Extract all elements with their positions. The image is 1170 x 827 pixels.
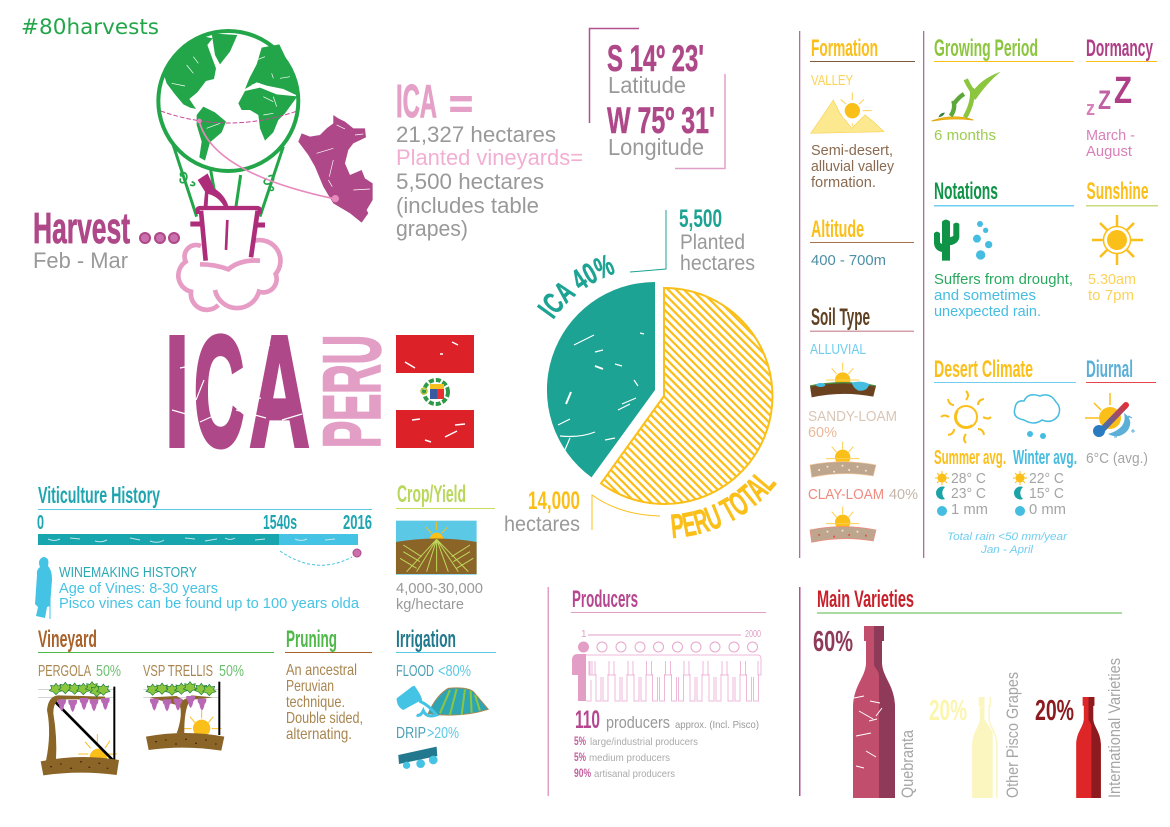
icon: alluvial soil [810, 363, 876, 397]
variety percentages: 20% [1035, 695, 1074, 727]
Ica area text [396, 75, 583, 241]
equator dashed line [161, 111, 297, 123]
panel: growing period: Growing Period [934, 35, 1038, 62]
Ica area text: 5,500 hectares [396, 169, 544, 194]
flag emblem [421, 380, 448, 404]
icon: pergola vine [38, 682, 119, 775]
panel: dormancy [1086, 35, 1157, 160]
panel: formation [810, 35, 915, 191]
panel: desert climate [934, 356, 1077, 556]
producers count: 110 [575, 706, 600, 734]
Ica area text: (includes table [396, 193, 539, 218]
title: ICA: C [194, 304, 244, 480]
bottle: other Pisco grapes [972, 697, 997, 798]
summer averages: 28° C [951, 470, 986, 487]
panel: diurnal [1085, 356, 1156, 467]
panel: diurnal: 6°C (avg.) [1086, 450, 1148, 467]
icon: winter cloud [1014, 395, 1060, 439]
pie: Ica 40% [547, 282, 655, 477]
panel: crop yield: kg/hectare [396, 596, 464, 613]
panel: dormancy: August [1086, 143, 1133, 160]
producer breakdown: 90% [574, 766, 591, 780]
producer breakdown [574, 734, 698, 780]
panel: producers [548, 586, 766, 796]
variety percentages: 20% [929, 695, 967, 727]
panel: soil type: Soil Type [811, 304, 870, 331]
panel: crop yield: 4,000-30,000 [396, 580, 483, 597]
pictogram scale: 1 [581, 629, 587, 640]
total rain note: Total rain <50 mm/year [947, 531, 1068, 543]
coordinates box: Latitude [608, 72, 686, 98]
panel: altitude: 400 - 700m [811, 252, 886, 269]
icon: valley with sun [811, 93, 884, 133]
title: PERU: PERU [308, 335, 398, 448]
pie chart [536, 254, 777, 538]
harvest heading: Feb - Mar [33, 248, 128, 273]
panel: formation: VALLEY [811, 72, 853, 89]
Ica area text: ICA [396, 75, 437, 127]
summer averages [934, 447, 1006, 518]
panel: pruning: technique. [286, 694, 345, 711]
column dividers [799, 31, 924, 558]
panel: crop yield: Crop/Yield [397, 481, 466, 508]
icon: thermometer with sun and moon [1085, 393, 1135, 437]
panel: irrigation: >20% [427, 725, 459, 742]
callout: planted hectares: Planted [680, 231, 745, 254]
producers count: approx. (Incl. Pisco) [675, 719, 759, 731]
winemaking text [59, 564, 360, 612]
panel: irrigation: Irrigation [396, 626, 456, 653]
timeline labels: 1540s [263, 512, 297, 534]
icon: Peruvian flag [396, 335, 474, 448]
map of Peru [298, 115, 373, 223]
producers count: producers [606, 713, 670, 732]
globe [158, 31, 298, 171]
callout: total hectares [504, 487, 660, 536]
pie: Peru total [601, 288, 772, 504]
cloud and bucket [178, 173, 280, 310]
panel: pruning: An ancestral [286, 662, 357, 679]
panel: pruning: Double sided, [286, 710, 363, 727]
callout: total hectares: hectares [504, 513, 580, 536]
panel: sunshine: 5.30am [1088, 271, 1136, 288]
Ica area text: 21,327 hectares [396, 122, 556, 147]
variety names [898, 658, 1124, 798]
winemaking text: Pisco vines can be found up to 100 years olda [59, 595, 360, 612]
Ica area text: Planted vineyards= [396, 145, 583, 170]
icon: sun [1092, 215, 1143, 265]
callout: planted hectares: hectares [680, 252, 755, 275]
panel: main varieties [799, 586, 1124, 798]
panel: soil type: ALLUVIAL [810, 341, 866, 358]
panel: vineyard: VSP TRELLIS [143, 663, 213, 680]
winter averages: 0 mm [1029, 501, 1066, 518]
pie labels [536, 254, 777, 538]
panel: soil type: SANDY-LOAM [808, 408, 897, 425]
panel: notations: Suffers from drought, [934, 271, 1073, 288]
harvest heading [33, 204, 179, 273]
icon: drip irrigation [398, 747, 438, 769]
icon: sleeping zzz [1086, 70, 1132, 120]
callout: planted hectares [630, 205, 755, 275]
total rain note: Jan - April [980, 544, 1034, 556]
icon: sleeping zzz: Z [1114, 70, 1132, 112]
panel: diurnal: Diurnal [1086, 356, 1133, 383]
panel: formation: formation. [811, 174, 876, 191]
producer breakdown: medium producers [589, 752, 670, 764]
panel: vineyard: 50% [219, 663, 244, 680]
timeline labels [37, 512, 372, 534]
icon: sleeping zzz: Z [1098, 85, 1111, 115]
panel: formation: Semi-desert, [811, 142, 893, 159]
icon: growing shoots [932, 72, 1001, 121]
icon: vineyard field [396, 521, 477, 575]
title: ICA: A [250, 304, 310, 480]
Peru distress marks [317, 125, 370, 190]
panel: formation: Formation [811, 35, 878, 62]
panel: notations [934, 178, 1074, 320]
pictogram scale [581, 629, 761, 640]
icon: clay-loam soil [810, 507, 876, 542]
timeline labels: 0 [37, 512, 44, 534]
winter averages: Winter avg. [1013, 447, 1077, 469]
pie labels: ICA 40% [536, 254, 614, 320]
icon: rain drops [973, 221, 992, 260]
producer breakdown: 5% [574, 734, 586, 748]
winter averages: 22° C [1029, 470, 1064, 487]
pie: Ica distress marks [558, 333, 644, 452]
pictogram: people [572, 642, 761, 701]
panel: viticulture history: Viticulture History [38, 482, 160, 508]
globe distress marks [172, 57, 290, 128]
panel: growing period [932, 35, 1074, 144]
icon: elderly woman [35, 557, 52, 618]
producer breakdown: artisanal producers [594, 768, 675, 780]
callout: planted hectares: 5,500 [679, 205, 722, 233]
icon: sandy-loam soil [810, 442, 876, 477]
variety names: Quebranta [898, 730, 917, 798]
panel: soil type: 60% [808, 424, 837, 441]
panel: notations: unexpected rain. [934, 303, 1041, 320]
winter averages: 15° C [1029, 485, 1064, 502]
balloon ropes [173, 143, 283, 217]
icon: flood irrigation [397, 686, 488, 716]
bottle in bucket [198, 173, 228, 206]
coordinates box: Longitude [608, 134, 704, 160]
panel: notations: and sometimes [934, 287, 1036, 304]
timeline arc and marker [280, 551, 352, 565]
total rain note [947, 531, 1068, 556]
variety names: International Varieties [1105, 658, 1124, 798]
icon: summer sun [941, 391, 991, 443]
producer breakdown: large/industrial producers [590, 736, 698, 748]
panel: irrigation: FLOOD [396, 663, 434, 680]
winter averages [1013, 447, 1077, 518]
panel: vineyard: 50% [96, 663, 121, 680]
summer averages: Summer avg. [934, 447, 1006, 469]
panel: main varieties: Main Varieties [817, 586, 914, 613]
producer breakdown: 5% [574, 750, 586, 764]
timeline bar [38, 534, 358, 545]
panel: vineyard: Vineyard [38, 626, 97, 653]
panel: notations: Notations [934, 178, 998, 205]
location connector [199, 122, 335, 199]
bottle: international varieties [1076, 697, 1101, 798]
panel: sunshine [1086, 178, 1158, 304]
panel: growing period: 6 months [934, 127, 996, 144]
coordinates box [590, 28, 725, 168]
winemaking text: WINEMAKING HISTORY [59, 564, 197, 581]
panel: altitude [810, 216, 914, 269]
producers count [575, 706, 759, 734]
panel: vineyard: PERGOLA [38, 663, 91, 680]
panel: altitude: Altitude [811, 216, 864, 243]
harvest heading: Harvest [33, 204, 130, 253]
panel: dormancy: March - [1086, 127, 1135, 144]
panel: irrigation: <80% [438, 663, 471, 680]
summer averages: 23° C [951, 485, 986, 502]
bottle: Quebranta [853, 626, 895, 798]
panel: formation: alluvial valley [811, 158, 894, 175]
panel: soil type: 40% [889, 486, 918, 503]
panel: pruning: alternating. [286, 726, 352, 743]
panel: irrigation [396, 626, 496, 769]
variety percentages: 60% [813, 626, 853, 658]
panel: pruning: Pruning [286, 626, 337, 653]
icon: globe hot-air balloon [158, 31, 373, 310]
panel: soil type: CLAY-LOAM [808, 486, 884, 503]
panel: producers: Producers [572, 586, 638, 613]
panel: vineyard [38, 626, 274, 775]
icon: sleeping zzz: z [1086, 98, 1095, 120]
variety names: Other Pisco Grapes [1003, 672, 1022, 798]
title: ICA: I [165, 304, 189, 480]
icon: cactus [934, 220, 959, 261]
coordinates box: W 75º 31' [607, 100, 715, 141]
callout: total hectares: 14,000 [528, 487, 580, 515]
harvest dots [140, 233, 179, 243]
panel: irrigation: DRIP [396, 725, 426, 742]
panel: pruning [285, 626, 372, 743]
panel: desert climate: Desert Climate [934, 356, 1033, 383]
pie labels: PERU TOTAL [670, 474, 777, 538]
variety percentages [813, 626, 1074, 727]
coordinates box: S 14º 23' [607, 38, 704, 79]
location markers [197, 119, 339, 202]
continents [164, 33, 297, 161]
pictogram scale: 2000 [745, 629, 761, 640]
timeline labels: 2016 [343, 512, 372, 534]
panel: pruning: Peruvian [286, 678, 334, 695]
panel: sunshine: to 7pm [1088, 287, 1134, 304]
panel: viticulture history [35, 482, 372, 619]
panel: crop yield [396, 481, 495, 613]
bucket [201, 211, 258, 261]
Ica area text: grapes) [396, 216, 468, 241]
panel: soil type [808, 304, 918, 542]
winemaking text: Age of Vines: 8-30 years [59, 580, 218, 597]
Ica area text: = [449, 82, 473, 126]
hashtag: #80harvests [21, 15, 159, 39]
summer averages: 1 mm [951, 501, 988, 518]
icon: VSP trellis vine [143, 682, 224, 751]
